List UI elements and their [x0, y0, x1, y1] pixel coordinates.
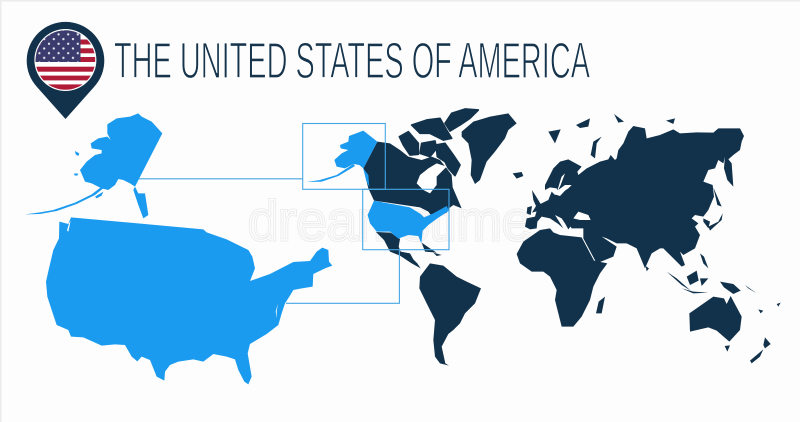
Alaska connector: [138, 178, 303, 180]
Arctic Canada and Greenland: [399, 109, 517, 184]
USA connector: [286, 250, 399, 303]
map pin with flag: [27, 22, 104, 119]
Queen Elizabeth Islands: [412, 118, 452, 140]
Canada: [363, 142, 462, 218]
USA and Alaska on world map: [307, 131, 449, 243]
Mexico and Central America: [376, 232, 421, 268]
connector boxes and lines: [138, 124, 449, 303]
South America: [419, 263, 481, 366]
Tasmania: [725, 345, 730, 352]
Japan: [703, 213, 723, 231]
Madagascar: [596, 297, 605, 313]
watermark: dreamstime: [248, 189, 532, 252]
Ellesmere Island: [445, 109, 478, 131]
Australia: [689, 296, 742, 342]
Eurasia: [525, 126, 744, 268]
Eurasia, Africa, Oceania: [517, 114, 781, 363]
pin body: [27, 22, 104, 119]
Baltic Sea: [556, 173, 572, 196]
watermark: dreamstime: [248, 189, 532, 252]
Greenland: [462, 113, 517, 184]
world map: [363, 109, 781, 366]
enlarged Alaska: [25, 113, 162, 218]
USA box: [363, 189, 449, 250]
British Isles: [527, 190, 541, 215]
Americas: [363, 142, 541, 366]
Africa: [517, 228, 607, 327]
Alaska on world map: [334, 131, 377, 168]
Banks Island: [399, 132, 418, 155]
enlarged contiguous USA: [46, 217, 332, 384]
Black Sea: [573, 212, 591, 220]
Spitsbergen and Arctic islands: [548, 114, 675, 158]
Victoria Island: [420, 141, 437, 157]
New Zealand: [750, 337, 771, 363]
Iceland: [513, 172, 523, 179]
Kamchatka and Sakhalin: [713, 155, 733, 207]
Hudson Bay: [417, 163, 447, 193]
Baffin Island: [436, 143, 460, 176]
flag badge: [34, 29, 96, 91]
Pacific islands: [745, 285, 781, 313]
Alaska box: [303, 124, 385, 189]
Southeast Asia islands: [646, 253, 741, 294]
contiguous USA on world map: [368, 201, 449, 243]
Caribbean: [422, 243, 442, 256]
